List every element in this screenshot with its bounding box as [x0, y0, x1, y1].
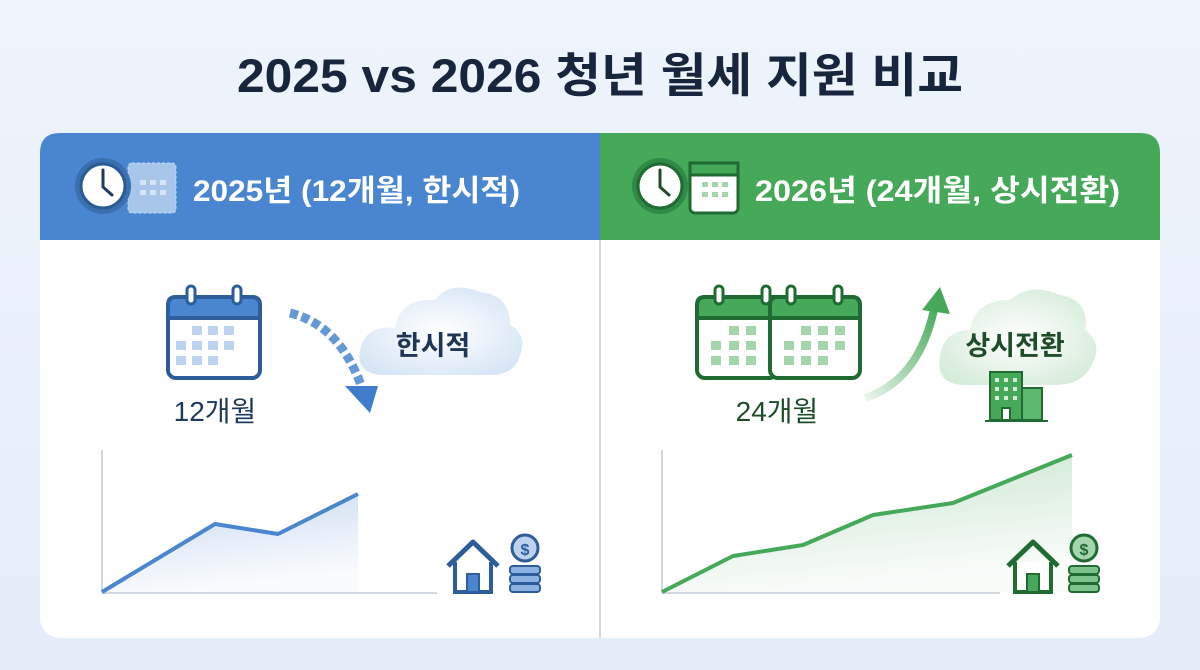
title: 2025 vs 2026 청년 월세 지원 비교: [237, 49, 963, 102]
icon: house and coins: $: [521, 542, 530, 559]
icon: house and coins green: [1008, 535, 1099, 592]
icon: house and coins: [448, 535, 540, 592]
header: 2026: [600, 133, 1160, 240]
cloud: 한시적: [359, 288, 522, 375]
icon: clock and calendar: [75, 158, 176, 214]
icon: building: [985, 372, 1048, 421]
header: 2025: [40, 133, 600, 240]
header: 2025: 2025년 (12개월, 한시적): [193, 175, 520, 208]
icon: calendar 12: [168, 286, 260, 378]
chart: 2025 line: [102, 450, 437, 593]
chart: 2026 line: [662, 450, 1072, 593]
arrow: dashed down: [290, 313, 378, 413]
icon: two calendars: [697, 286, 860, 378]
label: 24개월: 24개월: [736, 396, 818, 427]
icon: house and coins green: $: [1080, 542, 1089, 559]
panel: 2025: [40, 133, 600, 593]
header: 2026: 2026년 (24개월, 상시전환): [755, 175, 1120, 208]
icon: clock and calendar green: [632, 158, 738, 214]
cloud: 상시전환: 상시전환: [965, 331, 1065, 361]
cloud: 상시전환: [939, 290, 1096, 385]
label: 12개월: 12개월: [174, 396, 256, 427]
panel: 2026: [600, 133, 1160, 593]
arrow: up: [865, 287, 950, 398]
cloud: 한시적: 한시적: [396, 331, 470, 361]
card: [40, 133, 1160, 638]
